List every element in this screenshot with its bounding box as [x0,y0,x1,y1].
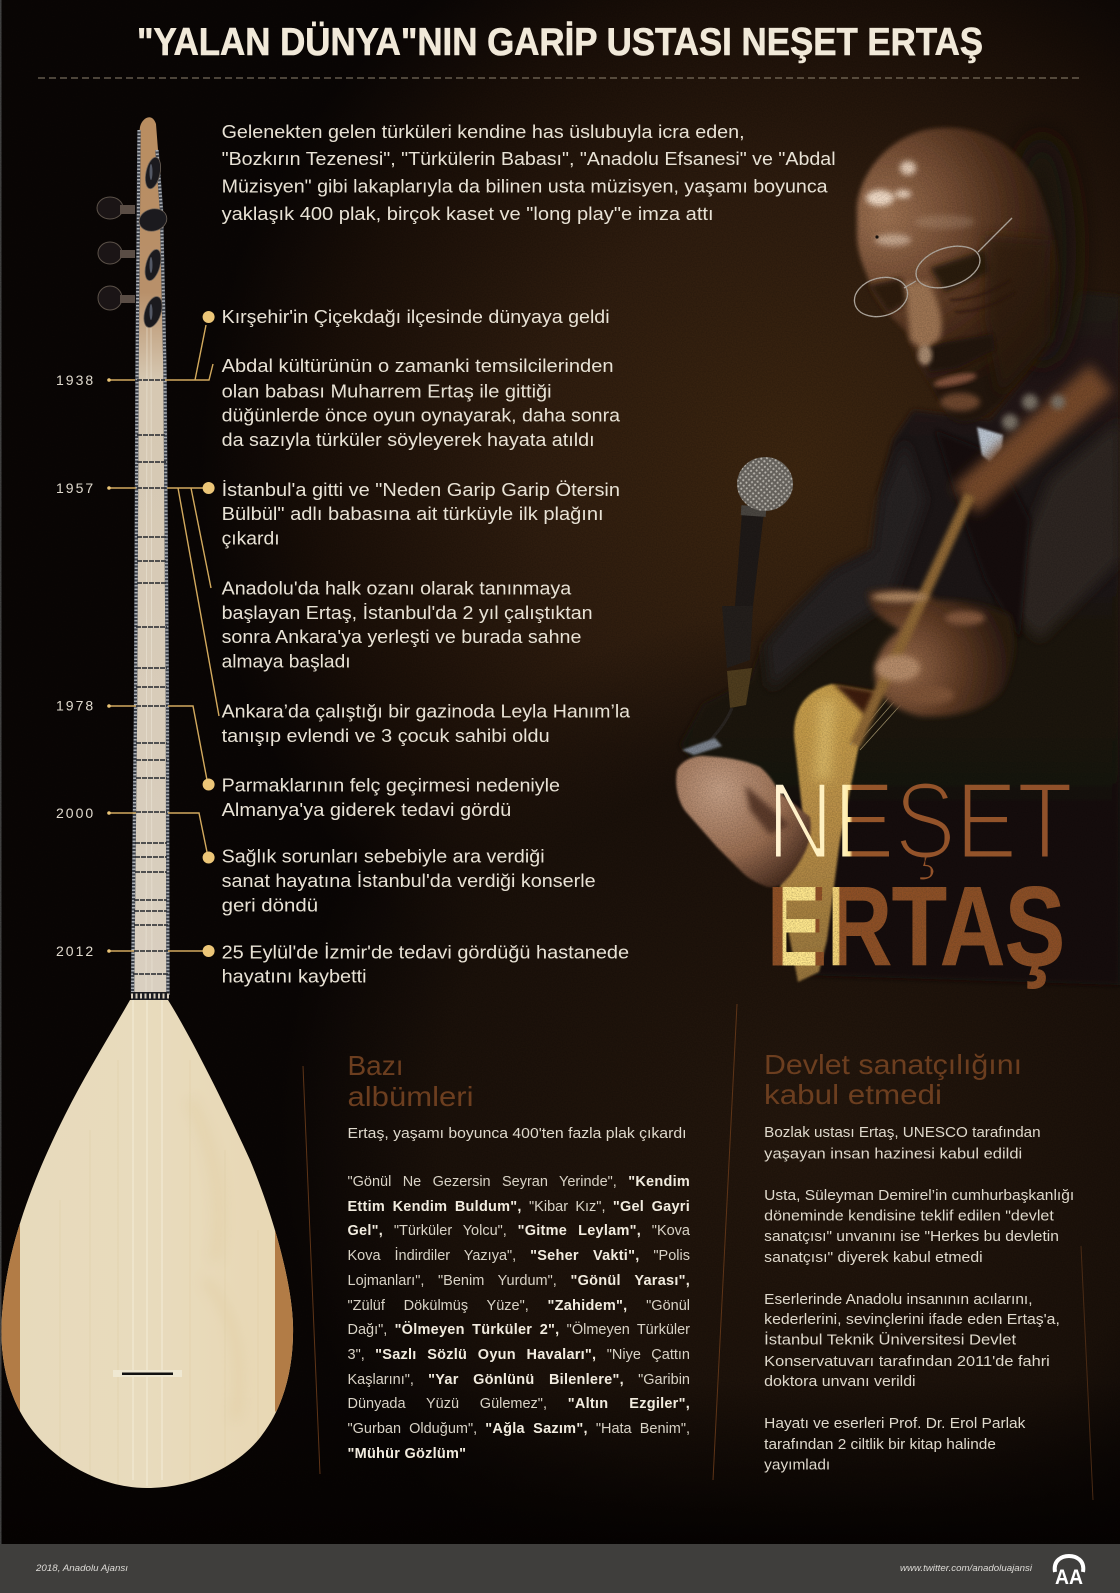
intro text: Müzisyen" gibi lakaplarıyla da bilinen usta müzisyen, yaşamı boyunca [222,176,828,196]
intro text: "Bozkırın Tezenesi", "Türkülerin Babası", "Anadolu Efsanesi" ve "Abdal [222,148,836,169]
face [857,128,1059,422]
timeline text: 2012: 25 Eylül'de İzmir'de tedavi gördüğü hastanede [222,941,629,962]
right column text: Hayatı ve eserleri Prof. Dr. Erol Parlak [764,1416,1026,1432]
saz tuning pegs [97,156,169,330]
heading: state artist: Devlet sanatçılığını [764,1049,1022,1080]
timeline text: 1978: Almanya'ya giderek tedavi gördü [222,799,511,820]
facial shading, nose, moustache and mouth [868,278,912,314]
hair and back of head [1008,135,1076,365]
forehead highlights [866,161,975,246]
saz body [780,684,878,982]
timeline text: marriage: tanışıp evlendi ve 3 çocuk sahibi oldu [222,725,550,746]
fretting hand [867,588,1014,716]
microphone [706,457,793,745]
album list: "Mühür Gözlüm" [348,1446,466,1462]
saz body [0,1000,300,1488]
timeline text: childhood: da sazıyla türküler söyleyerek hayata atıldı [222,429,595,450]
intro text [222,121,836,224]
timeline text: 1957: çıkardı [222,528,280,549]
icon: Anadolu Agency logo [1055,1556,1083,1589]
heading: state artist [764,1049,1022,1110]
icon: Anadolu Agency logo: AA [1055,1566,1083,1589]
timeline text: 1957: Bülbül" adlı babasına ait türküyle ilk plağını [222,503,604,524]
right column text: Konservatuvarı tarafından 2011'de fahri [764,1354,1050,1370]
heading: albums: albümleri [348,1081,474,1112]
right column text: yayımladı [764,1458,830,1474]
timeline years [56,372,95,959]
fingers over the neck [872,592,985,704]
right column text: doktora unvanı verildi [764,1374,916,1390]
timeline text: Ankara [222,577,593,672]
album list: Dağı", "Ölmeyen Türküler 2", "Ölmeyen Türküler [348,1322,690,1338]
right column text: tarafından 2 ciltlik bir kitap halinde [764,1437,996,1453]
timeline years: 1978 [56,698,95,714]
timeline text: 2000 [222,846,596,916]
timeline years: 1938 [56,372,95,388]
timeline text: 2000: geri döndü [222,894,318,916]
right column text: sanatçısı" unvanını ise "Herkes bu devletin [764,1229,1059,1245]
jacket [680,292,1120,985]
photo: Neşet Ertaş playing the saz [676,128,1120,985]
intro text: yaklaşık 400 plak, birçok kaset ve "long play"e imza attı [222,203,714,224]
timeline dots [107,311,215,957]
timeline text: childhood [222,355,621,450]
album list: Gel", "Türküler Yolcu", "Gitme Leylam", "Kova [348,1223,690,1239]
timeline years: 2000 [56,805,95,821]
saz bridge [113,1370,182,1377]
heading: albums: Bazı [348,1050,404,1081]
album list: "Gurban Olduğum", "Ağla Sazım", "Hata Benim", [348,1421,690,1437]
album list: "Zülüf Dökülmüş Yüze", "Zahidem", "Gönül [348,1298,690,1314]
right column text: Usta, Süleyman Demirel’in cumhurbaşkanlığı [764,1188,1074,1204]
right column text: sanatçısı" diyerek kabul etmedi [764,1250,983,1266]
icon: saz instrument [0,117,300,1488]
albums intro: Ertaş, yaşamı boyunca 400'ten fazla plak çıkardı [348,1126,686,1142]
right column text: kederlerini, sevinçlerini ifade eden Ertaş'a, [764,1312,1060,1328]
timeline years: 1957 [56,480,95,496]
saz neck [131,117,169,1000]
saz headstock [965,378,1102,500]
album list: "Gönül Ne Gezersin Seyran Yerinde", "Kendim [348,1174,690,1190]
frets [133,380,168,974]
timeline text: marriage: Ankara’da çalıştığı bir gazinoda Leyla Hanım’la [222,700,631,721]
album list [348,1174,690,1462]
right column text: İstanbul Teknik Üniversitesi Devlet [764,1330,1016,1348]
timeline text: 2012: hayatını kaybetti [222,966,367,987]
right column text: yaşayan insan hazinesi kabul edildi [764,1146,1022,1162]
timeline text: childhood: Abdal kültürünün o zamanki temsilcilerinden [222,355,614,376]
glasses [850,218,1012,322]
timeline text: 2012 [222,941,629,987]
right column text [764,1125,1074,1474]
album list: Dünyada Yüzü Gülemez", "Altın Ezgiler", [348,1396,690,1412]
heading: albums [348,1050,474,1112]
right column text: döneminde kendisine teklif edilen "devlet [764,1208,1054,1224]
album list: Ettim Kendim Buldum", "Kibar Kız", "Gel Gayri [348,1199,690,1215]
right column text: Bozlak ustası Ertaş, UNESCO tarafından [764,1125,1041,1141]
shirt collar [977,427,1003,462]
timeline years: 2012 [56,943,95,959]
timeline text: childhood: olan babası Muharrem Ertaş ile gittiği [222,380,552,401]
dashed divider [38,77,1081,79]
title: "YALAN DÜNYA"NIN GARİP USTASI NEŞET ERTAŞ [137,21,983,64]
saz neck [855,495,970,745]
timeline text: 1978: Parmaklarının felç geçirmesi nedeniyle [222,775,560,796]
timeline text: marriage [222,700,631,746]
album list: Kaşlarını", "Yar Gönlünü Bilenlere", "Garibin [348,1372,690,1388]
timeline text: 1957 [222,479,620,549]
timeline text: 2000: Sağlık sorunları sebebiyle ara verdiği [222,846,545,867]
timeline text: Ankara: Anadolu'da halk ozanı olarak tanınmaya [222,577,572,598]
timeline text: Ankara: almaya başladı [222,651,351,672]
timeline text: birth: Kırşehir'in Çiçekdağı ilçesinde dünyaya geldi [222,306,610,327]
heading: state artist: kabul etmedi [764,1079,942,1110]
timeline text: 2000: sanat hayatına İstanbul'da verdiği konserle [222,870,596,891]
timeline text: childhood: düğünlerde önce oyun oynayarak, daha sonra [222,405,621,426]
timeline connectors [109,325,219,951]
column rules [303,1004,1093,1500]
album list: Kova İndirdiler Yazıya", "Seher Vakti", "Polis [348,1248,690,1264]
plucking hand [676,756,811,887]
footer url: www.twitter.com/anadoluajansi [900,1563,1033,1574]
footer credit: 2018, Anadolu Ajansı [35,1563,128,1574]
album list: 3", "Sazlı Sözlü Oyun Havaları", "Niye Çattın [348,1347,690,1363]
timeline text: Ankara: başlayan Ertaş, İstanbul'da 2 yıl çalıştıktan [222,602,593,623]
footer bar [0,1544,1120,1593]
timeline text: 1978 [222,775,560,820]
intro text: Gelenekten gelen türküleri kendine has üslubuyla icra eden, [222,121,745,142]
right column text: Eserlerinde Anadolu insanının acılarını, [764,1292,1032,1308]
album list: Lojmanları", "Benim Yurdum", "Gönül Yarası", [348,1273,690,1289]
shirt cuff [682,738,722,755]
timeline text: 1957: İstanbul'a gitti ve "Neden Garip Garip Ötersin [222,479,620,500]
timeline text: Ankara: sonra Ankara'ya yerleşti ve burada sahne [222,626,581,647]
name: Neşet: NEŞET [767,760,1073,882]
